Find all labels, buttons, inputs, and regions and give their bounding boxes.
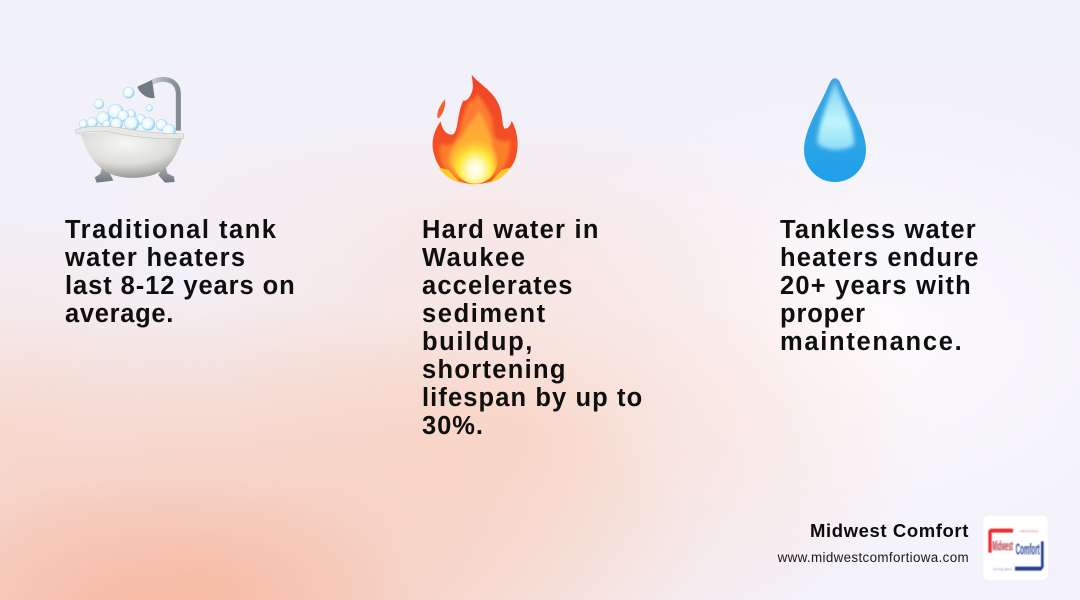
logo: HEATING (1020, 530, 1039, 534)
icon: bathtub (74, 76, 184, 183)
website url: www.midwestcomfortiowa.com (778, 550, 969, 565)
text: traditional tank fact: Traditional tank (65, 216, 277, 244)
text: traditional tank fact: last 8-12 years on (65, 272, 296, 300)
logo: Midwest (992, 538, 1013, 554)
text: hard water fact: Waukee (422, 244, 526, 272)
text: tankless fact: maintenance. (780, 328, 963, 356)
text: hard water fact (422, 216, 643, 440)
text: hard water fact: shortening (422, 356, 567, 384)
text: tankless fact (780, 216, 980, 356)
text: tankless fact: proper (780, 300, 866, 328)
logo: COOLING (993, 567, 1012, 571)
text: hard water fact: accelerates (422, 272, 574, 300)
brand name: Midwest Comfort (810, 520, 969, 541)
text: hard water fact: lifespan by up to (422, 384, 643, 412)
text: hard water fact: Hard water in (422, 216, 600, 244)
icon: fire (432, 74, 518, 186)
text: traditional tank fact (64, 216, 296, 328)
text: hard water fact: 30%. (422, 412, 484, 440)
text: tankless fact: heaters endure (780, 244, 980, 272)
icon: water drop (804, 78, 866, 182)
text: traditional tank fact: water heaters (65, 244, 246, 272)
text: traditional tank fact: average. (65, 300, 174, 328)
text: tankless fact: 20+ years with (780, 272, 972, 300)
logo (984, 516, 1048, 580)
text: hard water fact: sediment (422, 300, 547, 328)
text: tankless fact: Tankless water (780, 216, 977, 244)
text: hard water fact: buildup, (422, 328, 534, 356)
